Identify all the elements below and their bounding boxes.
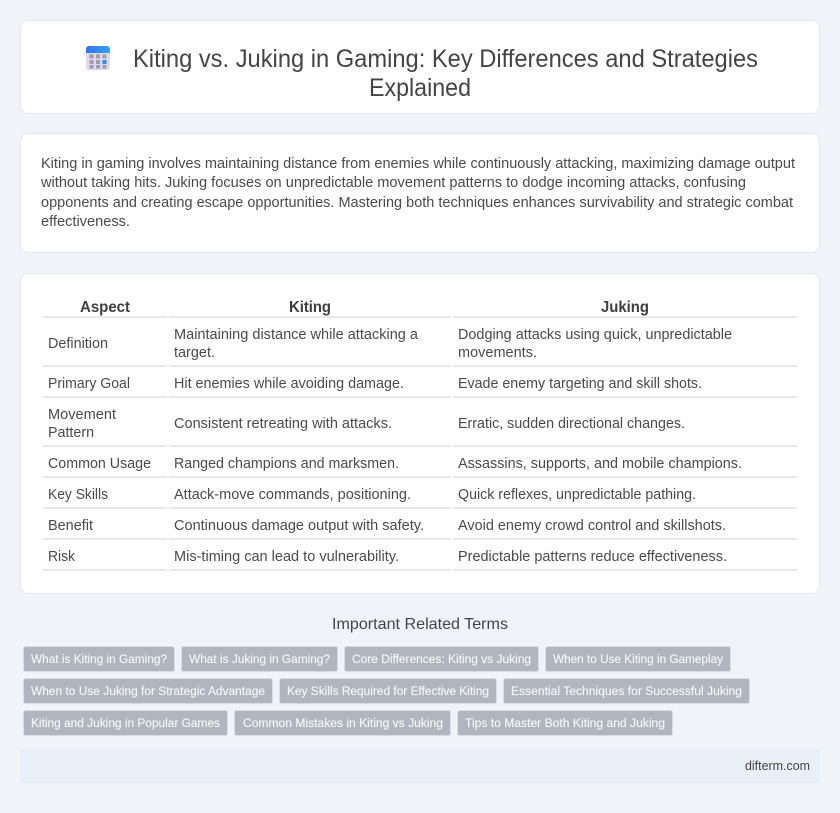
row: movement pattern: Consistent retreating with attacks. xyxy=(174,416,392,432)
tag: Core Differences: Kiting vs Juking xyxy=(352,652,531,666)
tag: Essential Techniques for Successful Juking xyxy=(511,684,742,698)
tag xyxy=(24,646,174,672)
row: benefit: Avoid enemy crowd control and skillshots. xyxy=(458,518,726,534)
row: definition: Dodging attacks using quick, unpredictable xyxy=(458,327,732,343)
row: common usage: Assassins, supports, and mobile champions. xyxy=(458,456,742,472)
table header xyxy=(80,299,649,316)
row: primary goal: Hit enemies while avoiding damage. xyxy=(174,376,404,392)
tag xyxy=(344,646,538,672)
intro paragraph: Kiting in gaming involves maintaining distance from enemies while continuously attacking, maximizing damage output xyxy=(41,156,795,172)
tag xyxy=(280,678,496,704)
tag xyxy=(24,710,228,736)
row: definition: Maintaining distance while attacking a xyxy=(174,327,419,343)
table header: Juking xyxy=(601,299,649,316)
tag: When to Use Juking for Strategic Advantage xyxy=(31,684,265,698)
row: primary goal: Primary Goal xyxy=(48,376,130,392)
title: Kiting vs. Juking in Gaming: Key Differences and Strategies xyxy=(133,45,758,73)
row: key skills: Attack-move commands, positioning. xyxy=(174,487,411,503)
footer xyxy=(20,749,820,783)
row: movement pattern: Pattern xyxy=(48,425,94,441)
title xyxy=(133,45,758,102)
row: benefit: Benefit xyxy=(48,518,93,534)
header panel xyxy=(20,20,820,114)
row: movement pattern xyxy=(48,407,685,441)
row: common usage: Ranged champions and marksmen. xyxy=(174,456,399,472)
row: common usage xyxy=(48,456,742,472)
row: risk: Risk xyxy=(48,549,76,565)
row: key skills xyxy=(48,487,696,503)
panel: comparison table xyxy=(20,274,820,594)
tag: Common Mistakes in Kiting vs Juking xyxy=(243,716,443,730)
row: key skills: Key Skills xyxy=(48,487,108,503)
row: movement pattern: Movement xyxy=(48,407,116,423)
intro paragraph: effectiveness. xyxy=(41,214,130,230)
title: Explained xyxy=(369,74,471,102)
row: primary goal: Evade enemy targeting and skill shots. xyxy=(458,376,702,392)
tag xyxy=(546,646,730,672)
row: risk: Mis-timing can lead to vulnerability. xyxy=(174,549,399,565)
panel: introduction xyxy=(20,134,820,252)
tag: Key Skills Required for Effective Kiting xyxy=(287,684,489,698)
intro paragraph: without taking hits. Juking focuses on unpredictable movement patterns to dodge incoming attacks, confusing xyxy=(40,175,746,191)
table header: Aspect xyxy=(80,299,131,316)
row: common usage: Common Usage xyxy=(48,456,151,472)
footer: difterm.com xyxy=(745,759,810,773)
table header: Kiting xyxy=(289,299,331,316)
tag xyxy=(458,710,672,736)
row: definition: Definition xyxy=(48,336,108,352)
row: risk: Predictable patterns reduce effectiveness. xyxy=(458,549,727,565)
icon: calendar xyxy=(86,46,110,70)
tag xyxy=(182,646,338,672)
tag: Kiting and Juking in Popular Games xyxy=(31,716,220,730)
row: movement pattern: Erratic, sudden directional changes. xyxy=(458,416,685,432)
tag xyxy=(234,710,450,736)
row: benefit xyxy=(48,518,726,534)
related terms tags xyxy=(24,646,750,736)
tag: Tips to Master Both Kiting and Juking xyxy=(465,716,665,730)
related terms heading: Important Related Terms xyxy=(332,616,508,633)
row: definition: movements. xyxy=(458,345,537,361)
row: primary goal xyxy=(48,376,702,392)
intro paragraph: opponents and creating escape opportunities. Mastering both techniques enhances survivability and strategic combat xyxy=(41,195,793,211)
intro paragraph xyxy=(40,156,795,230)
row: definition xyxy=(48,327,732,361)
tag: When to Use Kiting in Gameplay xyxy=(553,652,724,666)
tag: What is Kiting in Gaming? xyxy=(31,652,167,666)
tag xyxy=(24,678,272,704)
tag xyxy=(504,678,750,704)
row: benefit: Continuous damage output with safety. xyxy=(174,518,424,534)
row: definition: target. xyxy=(174,345,215,361)
row: key skills: Quick reflexes, unpredictable pathing. xyxy=(458,487,696,503)
tag: What is Juking in Gaming? xyxy=(189,652,330,666)
row: risk xyxy=(48,549,727,565)
